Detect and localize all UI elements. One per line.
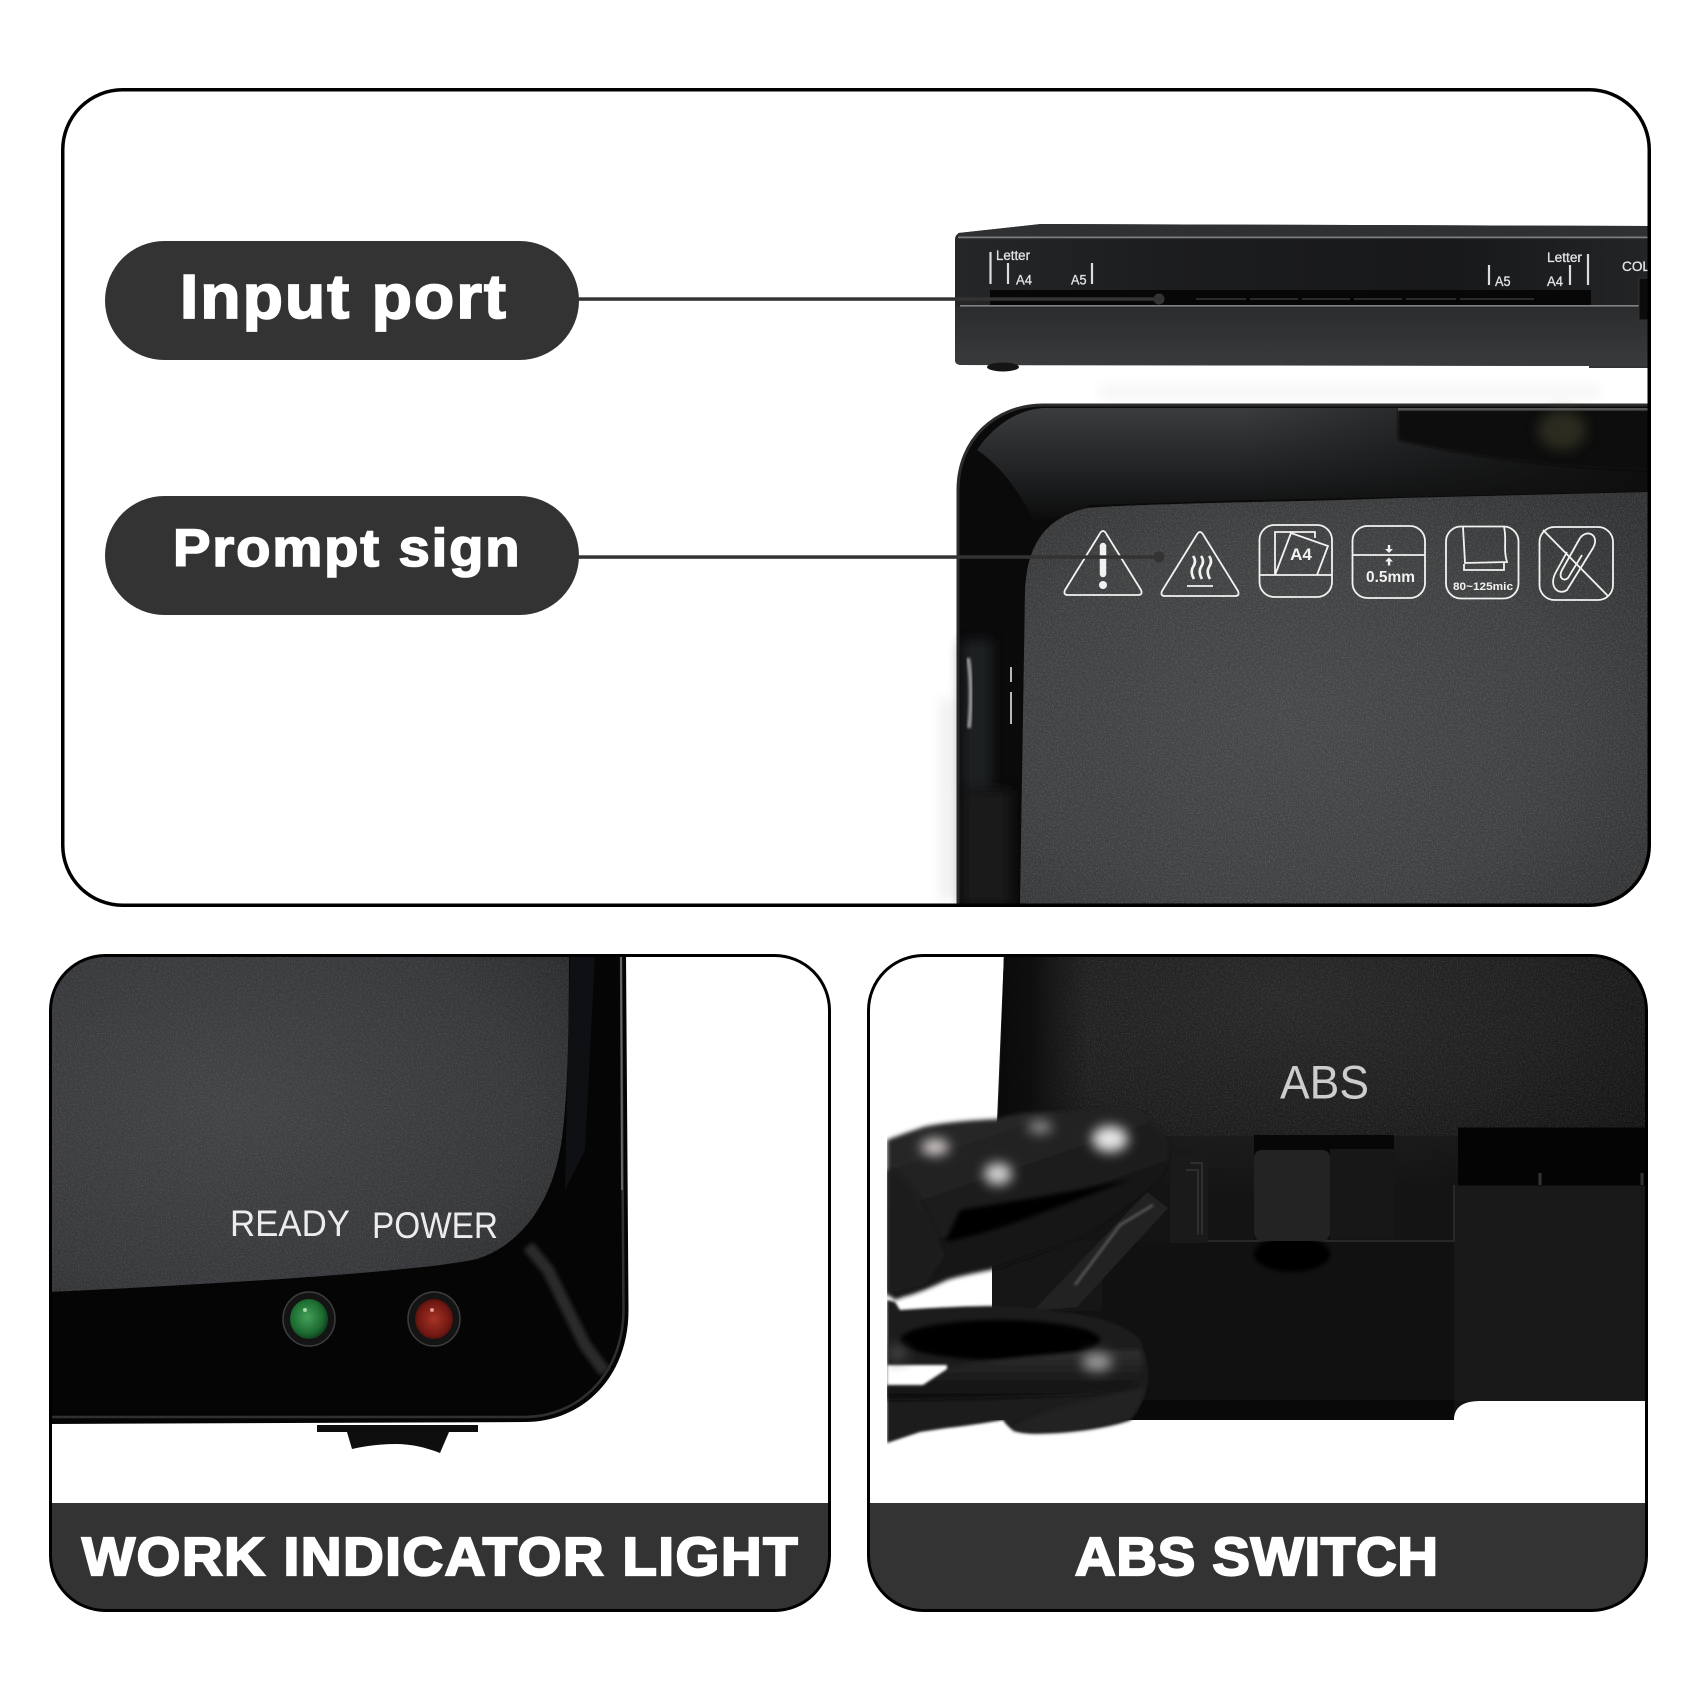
- icon: 0.5mm thickness: 0.5mm: [1366, 569, 1415, 586]
- switch slot: [1254, 1135, 1394, 1239]
- icon: A4 paper size: A4: [1290, 545, 1312, 564]
- icon: 0.5mm thickness: [1352, 526, 1425, 598]
- photo: laminator top with prompt signs: [940, 385, 1655, 910]
- icon: red LED: [408, 1292, 460, 1346]
- panel: work indicator light: [49, 954, 830, 1611]
- pill: Input port: [105, 241, 579, 360]
- panel: ABS switch: [868, 954, 1650, 1611]
- caption bar: ABS SWITCH: [868, 1503, 1646, 1611]
- caption bar: ABS SWITCH: ABS SWITCH: [1075, 1526, 1438, 1587]
- text: READY POWER: [230, 1203, 498, 1246]
- photo: laminator front with input port: A4: [1016, 272, 1032, 288]
- icon: A4 paper size: [1260, 525, 1332, 597]
- photo: indicator lights corner: [49, 954, 628, 1453]
- power connector: [1170, 1155, 1208, 1243]
- photo: laminator front with input port: Letter: [996, 248, 1030, 263]
- pill: Input port: Input port: [180, 262, 506, 332]
- icon: hot surface triangle: [1161, 532, 1239, 596]
- rear opening: [1458, 1128, 1648, 1186]
- icon: 80-125mic pouch: 80~125mic: [1453, 581, 1513, 593]
- panel: input port and prompt sign: [63, 90, 1655, 910]
- leader line: Input port: [578, 294, 1164, 304]
- caption bar: WORK INDICATOR LIGHT: WORK INDICATOR LIGHT: [82, 1526, 798, 1587]
- photo: ABS switch on laminator rear: [992, 954, 1650, 1420]
- icon: 80-125mic pouch: [1446, 526, 1518, 598]
- pill: Prompt sign: [105, 496, 579, 615]
- icon: power cable coil: [887, 1110, 1168, 1443]
- photo: laminator front with input port: COL: [1622, 259, 1650, 274]
- photo: laminator front with input port: [955, 224, 1651, 372]
- pill: Prompt sign: Prompt sign: [173, 518, 520, 578]
- lower housing: [992, 1258, 1038, 1307]
- icon: no paperclips: [1540, 527, 1613, 600]
- switch knob: [1254, 1241, 1330, 1272]
- text: READY POWER: POWER: [372, 1205, 498, 1246]
- leader line: Prompt sign: [578, 552, 1164, 562]
- icon: warning triangle: [1064, 531, 1142, 595]
- photo: laminator front with input port: A5: [1071, 272, 1086, 288]
- text: ABS: ABS: [1280, 1056, 1369, 1108]
- text: READY POWER: READY: [230, 1203, 350, 1244]
- caption bar: WORK INDICATOR LIGHT: [50, 1503, 830, 1611]
- photo: laminator front with input port: Letter: [1547, 250, 1583, 265]
- photo: laminator front with input port: A5: [1495, 274, 1510, 289]
- photo: laminator front with input port: A4: [1547, 274, 1563, 289]
- icon: green LED: [283, 1292, 335, 1346]
- tab under the device: [317, 1425, 478, 1453]
